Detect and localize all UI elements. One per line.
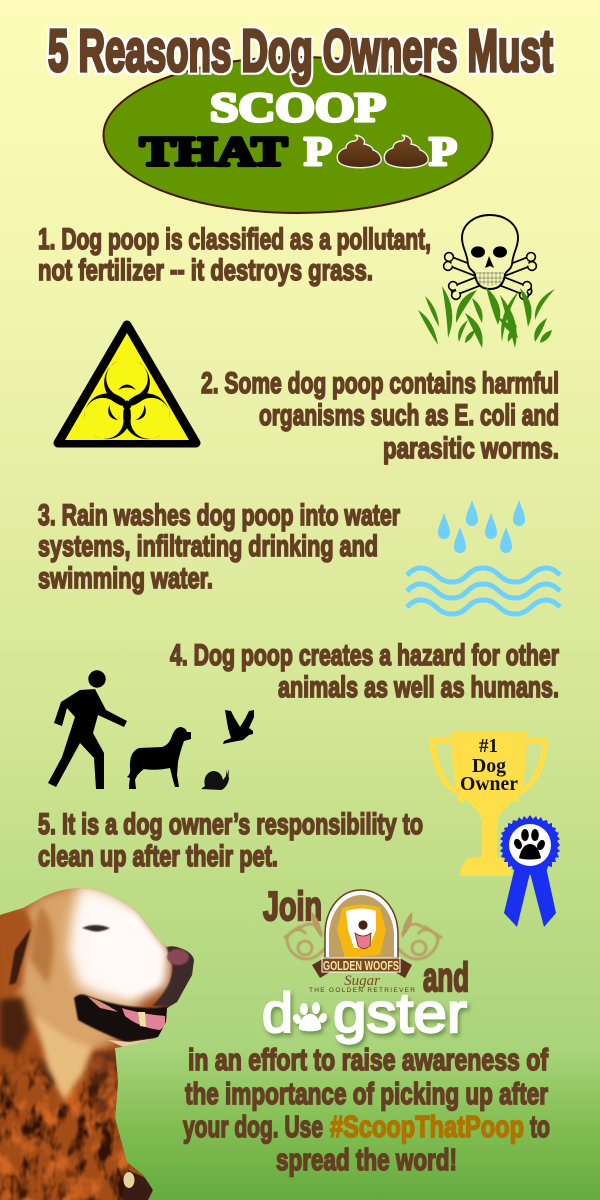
chin [108,1038,154,1047]
logo: Golden Woofs Sugar: Sugar [344,973,380,989]
under-ear shadow [0,998,30,1055]
retriever nose [358,920,368,930]
arch inner [329,895,394,965]
trophy label [460,736,518,795]
tooth [138,1012,146,1027]
icon: skull and crossbones [444,215,536,299]
logo: Golden Woofs Sugar: GOLDEN WOOFS [323,959,399,973]
join text: Join [263,883,322,929]
dogster logo: gster [333,981,467,1044]
dark muzzle [152,946,194,1007]
reason 3 text: 3. Rain washes dog poop into water [38,499,400,532]
paw highlight [124,1172,134,1188]
right chest shadow [88,1050,120,1125]
nose [167,949,189,965]
banner band [322,958,400,972]
icon: snail [201,769,229,790]
head fur [10,880,140,1055]
dogster logo: d [262,981,293,1044]
reason 1 text [38,223,431,287]
arch [325,890,398,965]
paw print [512,829,547,860]
call to action text: to [530,1109,550,1144]
and text: and [423,954,469,1000]
logo oval: Scoop That Poop [104,57,492,213]
icon: rain drops [438,500,525,553]
reason 2 text [201,367,559,465]
logo word: P..P: P [304,128,332,174]
icon: dog silhouette [127,727,191,789]
logo word: SCOOP: SCOOP [210,84,386,130]
logo word: THAT: THAT [140,128,287,174]
retriever tongue [355,933,371,948]
reason 3 text: swimming water. [38,562,213,595]
icon: walking person [48,670,127,789]
banner [312,957,412,978]
gold bib [34,1012,92,1100]
trophy label: Owner [460,774,518,795]
call to action text [183,1042,550,1177]
icon: trophy [429,732,548,876]
reason 4 text [170,639,559,704]
cartoon golden retriever [337,904,386,958]
tongue [122,1008,165,1030]
reason 3 text [38,499,400,595]
upper lip pink [88,997,118,1012]
icon: water waves [407,568,560,614]
retriever face [346,908,376,948]
ear [0,908,33,1005]
reason 5 text: 5. It is a dog owner’s responsibility to [38,808,423,841]
trophy label: Dog [472,756,506,777]
reason 1 text: not fertilizer -- it destroys grass. [38,254,373,287]
muzzle white sharpen [123,912,164,996]
mouth [74,994,170,1042]
call to action text: your dog. Use [183,1109,323,1144]
reason 5 text: clean up after their pet. [38,840,278,873]
chest fur texture [0,1040,135,1200]
icon: poop left [337,135,381,168]
eye [82,925,110,932]
leaves [312,912,412,938]
white face [68,886,170,1003]
dogster logo [262,981,467,1044]
icon: poop right [384,135,428,168]
reason 1 text: 1. Dog poop is classified as a pollutant, [38,223,431,256]
reason 3 text: systems, infiltrating drinking and [38,530,378,563]
icon: bird [223,710,254,744]
ear shadow [9,928,31,985]
paw in logo [291,1002,329,1031]
trophy label: #1 [479,736,498,757]
logo: Golden Woofs Sugar [284,890,442,994]
reason 5 text [38,808,423,873]
icon: blue ribbon with paw [500,815,560,927]
left neck fur band [30,905,53,985]
logo: Golden Woofs Sugar: THE GOLDEN RETRIEVER [309,987,415,994]
icon: grass [418,286,555,348]
hashtag: #ScoopThatPoop [330,1109,524,1144]
icon: biohazard warning triangle [58,325,196,447]
logo letter: P: P [429,128,457,174]
paw at bottom [122,1170,155,1200]
dog photo [0,880,200,1200]
call to action text: spread the word! [276,1142,457,1177]
ornamental scrolls [284,924,442,959]
